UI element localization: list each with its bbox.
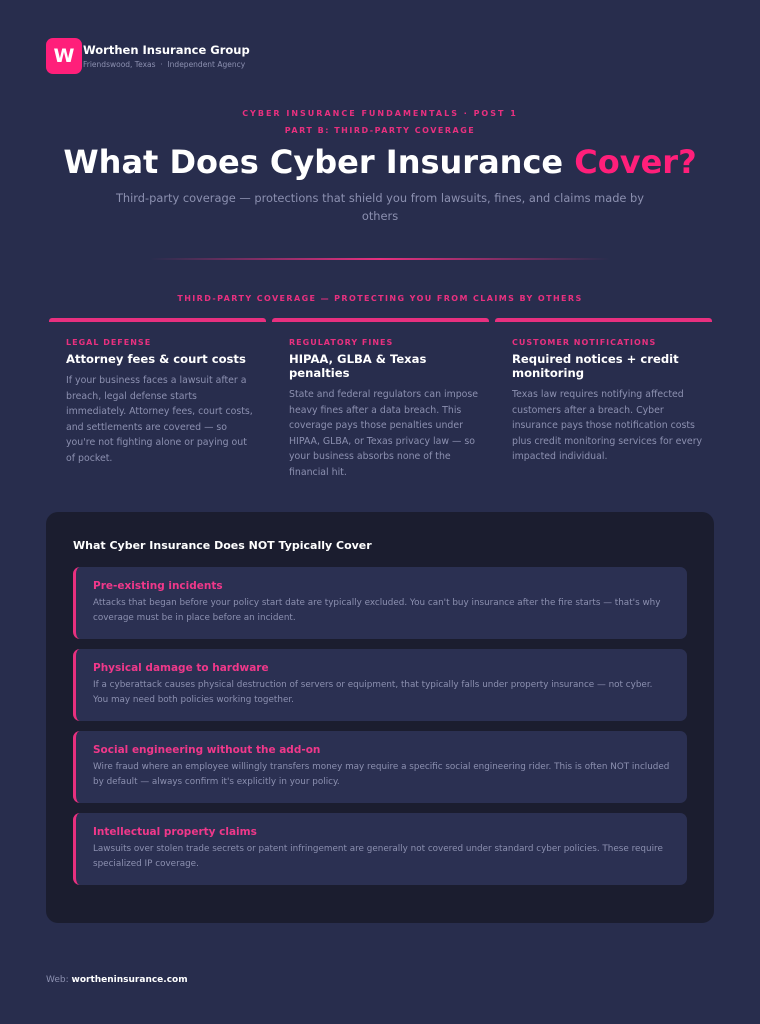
item: physical damage: Physical damage to hardware (93, 662, 269, 674)
footer: Web: wortheninsurance.com (46, 975, 188, 985)
card: regulatory fines: HIPAA, GLBA & Texas penalties (289, 352, 426, 380)
item: social engineering: Social engineering without the add-on (93, 744, 320, 756)
card: customer notifications: Texas law requires notifying affected customers after a breach. Cyber insurance pays those notification costs plus credit monitoring services for every impacted individual. (512, 389, 702, 462)
card: customer notifications: CUSTOMER NOTIFICATIONS (512, 338, 656, 347)
item: physical damage: If a cyberattack causes physical destruction of servers or equipment, that typically falls under property insurance — not cyber. You may need both policies working together. (93, 680, 652, 705)
brand name: Friendswood, Texas · Independent Agency (83, 60, 245, 69)
card: legal defense (49, 318, 266, 464)
brand name: Worthen Insurance Group (83, 43, 250, 57)
card: regulatory fines: REGULATORY FINES (289, 338, 393, 347)
card: customer notifications: Required notices + credit monitoring (512, 352, 679, 380)
item: social engineering: Wire fraud where an employee willingly transfers money may require a specific social engineering rider. This is often NOT included by default — always confirm it's explicitly in your policy. (93, 762, 669, 787)
item: social engineering (73, 731, 687, 803)
item: IP claims: Intellectual property claims (93, 826, 257, 838)
part kicker: PART B: THIRD-PARTY COVERAGE (285, 126, 475, 135)
exclusions heading: What Cyber Insurance Does NOT Typically Cover (73, 539, 372, 552)
item: pre-existing: Pre-existing incidents (93, 580, 223, 592)
card: legal defense: If your business faces a lawsuit after a breach, legal defense starts immediately. Attorney fees, court costs, and settlements are covered — so you're not fighting alone or paying out of pocket. (66, 375, 253, 464)
logo icon: W (54, 45, 74, 67)
item: IP claims: Lawsuits over stolen trade secrets or patent infringement are generally not covered under standard cyber policies. These require specialized IP coverage. (93, 844, 663, 869)
subtitle: Third-party coverage — protections that shield you from lawsuits, fines, and claims made by others (116, 191, 644, 223)
card: customer notifications (495, 318, 712, 462)
item: pre-existing: Attacks that began before your policy start date are typically excluded. You can't buy insurance after the fire starts — that's why coverage must be in place before an incident. (93, 598, 660, 623)
series kicker: CYBER INSURANCE FUNDAMENTALS · POST 1 (242, 109, 518, 118)
section label: THIRD-PARTY COVERAGE — PROTECTING YOU FROM CLAIMS BY OTHERS (177, 294, 583, 303)
card: regulatory fines (272, 318, 489, 478)
panel: exclusions (46, 512, 714, 923)
card: legal defense: LEGAL DEFENSE (66, 338, 151, 347)
brand name (83, 43, 250, 69)
title: What Does Cyber Insurance Cover? (63, 143, 697, 181)
logo icon (46, 38, 82, 74)
card: regulatory fines: State and federal regulators can impose heavy fines after a data breach. This coverage pays those penalties under HIPAA, GLBA, or Texas privacy law — so your business absorbs none of the financial hit. (289, 389, 478, 478)
card: legal defense: Attorney fees & court costs (66, 352, 246, 366)
item: pre-existing (73, 567, 687, 639)
item: physical damage (73, 649, 687, 721)
item: IP claims (73, 813, 687, 885)
